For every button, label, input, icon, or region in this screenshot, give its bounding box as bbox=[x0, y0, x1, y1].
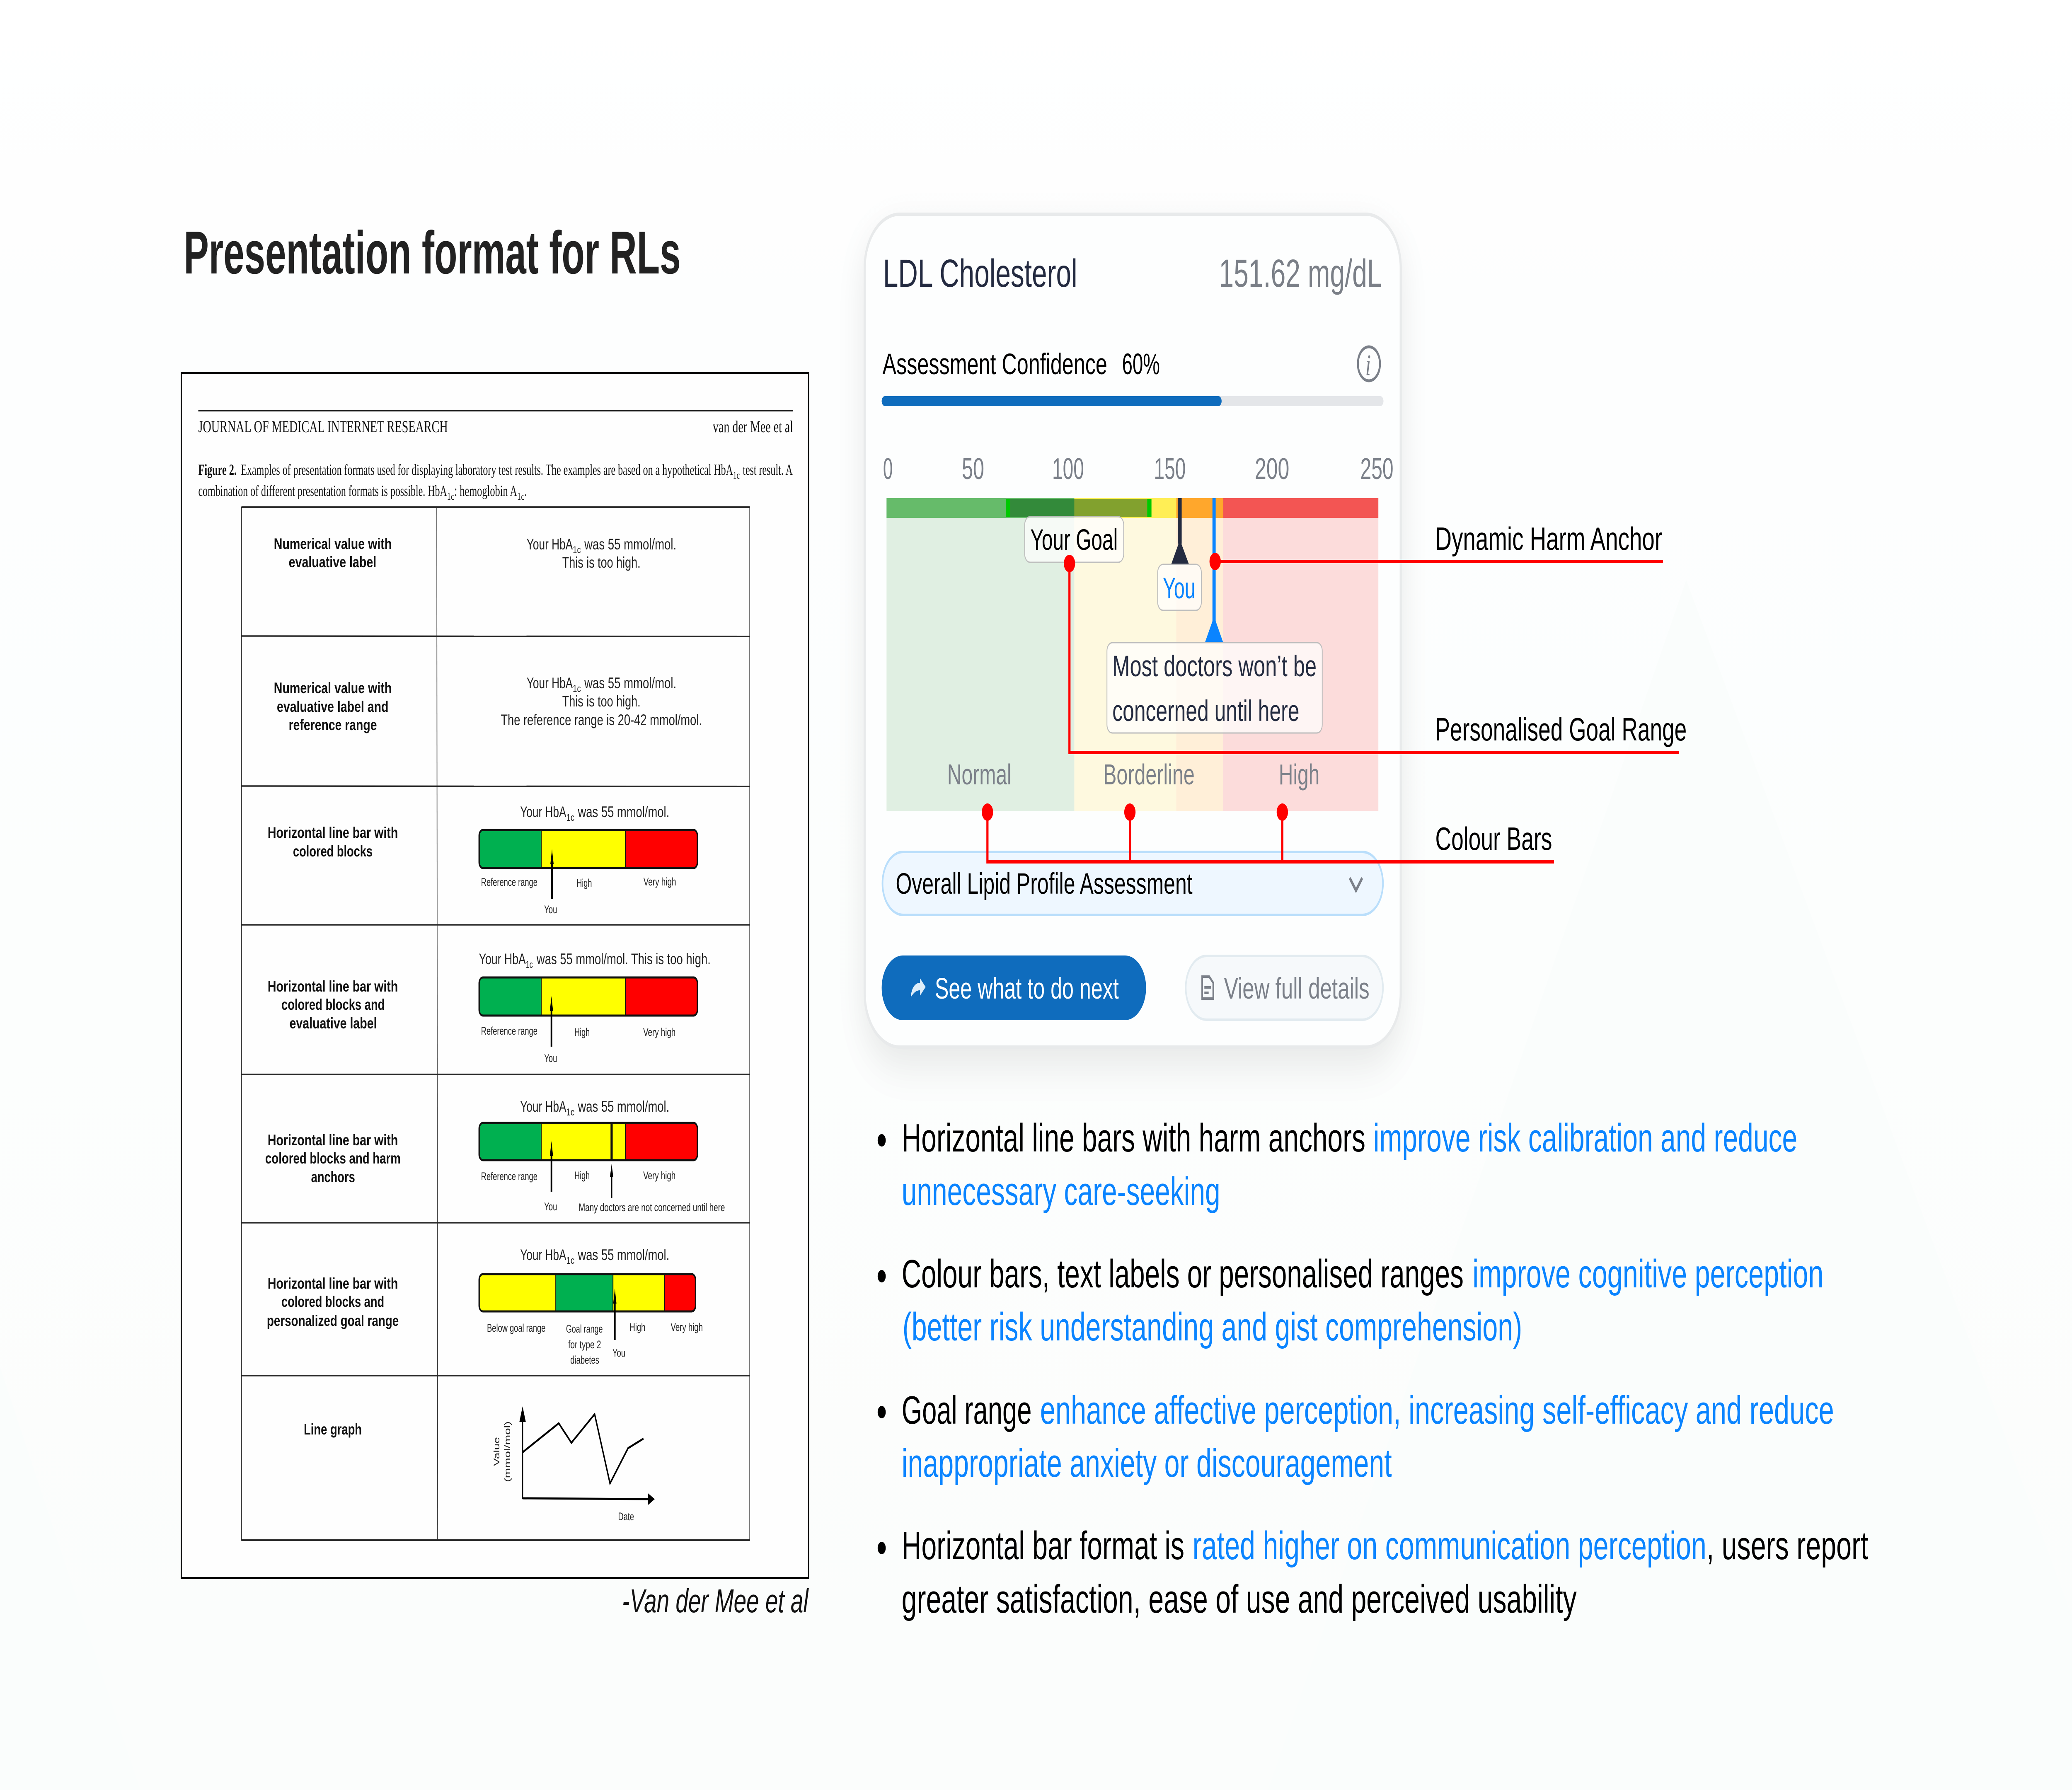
row 1: numerical value with evaluative label: 1c bbox=[573, 545, 581, 556]
bullet 1: improve risk calibration and reduce bbox=[1373, 1116, 1797, 1160]
citation: -Van der Mee et al bbox=[622, 1583, 809, 1620]
bullet 4: , users report bbox=[1706, 1524, 1868, 1568]
figure caption: . bbox=[525, 482, 527, 499]
row 5: horizontal line bar with colored blocks and harm anchors: You bbox=[544, 1200, 557, 1213]
icon: info bbox=[1358, 347, 1380, 382]
row 5: horizontal line bar with colored blocks and harm anchors: anchors bbox=[311, 1168, 355, 1185]
axis numbers: 150 bbox=[1154, 452, 1186, 485]
panel: research paper figure bbox=[181, 373, 809, 1579]
row 5: horizontal line bar with colored blocks and harm anchors: Many doctors are not concerned until here bbox=[579, 1201, 725, 1214]
row 4: horizontal line bar with colored blocks and evaluative label bbox=[268, 951, 711, 1064]
label: you: You bbox=[1163, 572, 1196, 605]
row 4: horizontal line bar with colored blocks and evaluative label: colored blocks and bbox=[281, 996, 385, 1013]
title: Presentation format for RLs bbox=[184, 219, 681, 287]
row 2: numerical value with evaluative label and reference range: was 55 mmol/mol. bbox=[584, 675, 676, 692]
row 5: horizontal line bar with colored blocks and harm anchors: Very high bbox=[643, 1169, 675, 1182]
row 3: horizontal line bar with colored blocks: Reference range bbox=[481, 876, 537, 888]
bullet 4 bbox=[878, 1524, 1868, 1621]
figure caption: 1c bbox=[447, 490, 454, 502]
row 6: horizontal line bar with colored blocks and personalized goal range: Below goal range bbox=[487, 1321, 545, 1334]
callout: personalised goal range: Personalised Goal Range bbox=[1435, 711, 1687, 747]
row 7: line graph: Line graph bbox=[304, 1421, 362, 1438]
row 1: numerical value with evaluative label: Numerical value with bbox=[274, 535, 392, 552]
bullet 2 bbox=[878, 1252, 1823, 1349]
dropdown: overall lipid profile assessment bbox=[883, 852, 1383, 915]
row 2: numerical value with evaluative label and reference range: Your HbA bbox=[527, 675, 573, 692]
row 6: horizontal line bar with colored blocks and personalized goal range: personalized goal range bbox=[267, 1312, 399, 1329]
label: most doctors: Most doctors won’t be bbox=[1112, 650, 1317, 682]
callout: dynamic harm anchor: Dynamic Harm Anchor bbox=[1435, 520, 1662, 557]
bullet 1 bbox=[878, 1116, 1797, 1214]
row 2: numerical value with evaluative label and reference range: 1c bbox=[573, 684, 581, 694]
row 6: horizontal line bar with colored blocks and personalized goal range: colored blocks and bbox=[281, 1293, 384, 1310]
row 4: horizontal line bar with colored blocks and evaluative label: Your HbA bbox=[479, 951, 526, 968]
row 6: horizontal line bar with colored blocks and personalized goal range bbox=[267, 1246, 703, 1366]
table grid bbox=[242, 507, 750, 1540]
row 3: horizontal line bar with colored blocks: Horizontal line bar with bbox=[268, 824, 398, 841]
row 4: horizontal line bar with colored blocks and evaluative label: was 55 mmol/mol. This is too high. bbox=[536, 951, 711, 968]
zone labels: Normal bbox=[947, 758, 1012, 791]
row 3: horizontal line bar with colored blocks: 1c bbox=[566, 813, 574, 823]
row 2: numerical value with evaluative label and reference range: evaluative label and bbox=[277, 698, 389, 715]
row 1: numerical value with evaluative label: evaluative label bbox=[289, 554, 376, 571]
bullet 4: rated higher on communication perception bbox=[1193, 1524, 1706, 1568]
row 3: horizontal line bar with colored blocks bbox=[268, 803, 697, 916]
callout: colour bars: Colour Bars bbox=[1435, 820, 1552, 857]
axis numbers: 200 bbox=[1255, 452, 1289, 485]
row 5: horizontal line bar with colored blocks and harm anchors: Reference range bbox=[481, 1170, 537, 1183]
icon: share arrow bbox=[911, 978, 926, 997]
bullet 3 bbox=[878, 1388, 1834, 1485]
axis numbers: 0 bbox=[883, 452, 893, 485]
row 6: horizontal line bar with colored blocks and personalized goal range: You bbox=[612, 1346, 625, 1359]
figure caption: Examples of presentation formats used for displaying laboratory test results. The examples are based on a hypothetical HbA bbox=[241, 461, 733, 478]
figure caption: combination of different presentation formats is possible. HbA bbox=[198, 482, 447, 499]
row 3: horizontal line bar with colored blocks: was 55 mmol/mol. bbox=[578, 803, 669, 820]
row 1: numerical value with evaluative label: This is too high. bbox=[562, 554, 641, 571]
row 7: line graph: (mmol/mol) bbox=[503, 1421, 512, 1482]
assessment confidence bbox=[882, 348, 1384, 406]
row 6: horizontal line bar with colored blocks and personalized goal range: Horizontal line bar with bbox=[268, 1275, 398, 1292]
bullet 4: Horizontal bar format is bbox=[902, 1524, 1184, 1568]
row 7: line graph: Date bbox=[618, 1510, 634, 1523]
row 7: line graph: Value bbox=[492, 1437, 501, 1466]
journal header: JOURNAL OF MEDICAL INTERNET RESEARCH bbox=[198, 418, 448, 436]
bullet 3: inappropriate anxiety or discouragement bbox=[902, 1442, 1392, 1485]
figure caption: : hemoglobin A bbox=[454, 482, 517, 499]
dropdown: overall lipid profile assessment: Overall Lipid Profile Assessment bbox=[896, 867, 1193, 900]
icon: info: i bbox=[1365, 349, 1371, 382]
row 1: numerical value with evaluative label: was 55 mmol/mol. bbox=[584, 536, 676, 553]
row 4: horizontal line bar with colored blocks and evaluative label: Reference range bbox=[481, 1024, 537, 1037]
panel: LDL cholesterol card bbox=[865, 214, 1401, 1064]
row 6: horizontal line bar with colored blocks and personalized goal range: for type 2 bbox=[568, 1338, 601, 1351]
row 1: numerical value with evaluative label bbox=[274, 535, 676, 571]
your value marker bbox=[1171, 498, 1189, 564]
row 2: numerical value with evaluative label and reference range: Numerical value with bbox=[274, 680, 392, 697]
label: most doctors: concerned until here bbox=[1112, 694, 1299, 727]
row 2: numerical value with evaluative label and reference range: The reference range is 20-42 mmol/mol. bbox=[501, 711, 702, 728]
row 2: numerical value with evaluative label and reference range: reference range bbox=[289, 716, 377, 733]
journal header: van der Mee et al bbox=[713, 418, 793, 436]
row 5: horizontal line bar with colored blocks and harm anchors: 1c bbox=[566, 1107, 574, 1118]
figure caption: 1c bbox=[733, 469, 740, 481]
figure caption bbox=[198, 461, 793, 502]
assessment confidence: Assessment Confidence bbox=[883, 348, 1107, 380]
row 5: horizontal line bar with colored blocks and harm anchors bbox=[265, 1098, 725, 1214]
row 5: horizontal line bar with colored blocks and harm anchors: colored blocks and harm bbox=[265, 1150, 401, 1167]
bullet 3: enhance affective perception, increasing self-efficacy and reduce bbox=[1040, 1388, 1834, 1432]
figure caption: test result. A bbox=[743, 461, 793, 478]
card value: 151.62 mg/dL bbox=[1219, 251, 1382, 295]
figure caption: Figure 2. bbox=[198, 461, 237, 478]
bullet 1: unnecessary care-seeking bbox=[902, 1170, 1220, 1214]
row 3: horizontal line bar with colored blocks: High bbox=[576, 876, 592, 889]
icon: document bbox=[1202, 977, 1213, 999]
card heading: LDL Cholesterol bbox=[883, 251, 1077, 295]
button: view full details bbox=[1186, 956, 1383, 1020]
axis numbers: 50 bbox=[962, 452, 984, 485]
axis numbers: 250 bbox=[1360, 452, 1394, 485]
label: you bbox=[1158, 564, 1201, 610]
axis numbers bbox=[883, 452, 1394, 485]
row 3: horizontal line bar with colored blocks: You bbox=[544, 903, 557, 916]
zone labels: High bbox=[1279, 758, 1319, 791]
axis numbers: 100 bbox=[1052, 452, 1084, 485]
row 1: numerical value with evaluative label: Your HbA bbox=[527, 536, 573, 553]
button: see what to do next: See what to do next bbox=[935, 972, 1119, 1005]
row 5: horizontal line bar with colored blocks and harm anchors: was 55 mmol/mol. bbox=[578, 1098, 669, 1115]
bullet 1: Horizontal line bars with harm anchors bbox=[902, 1116, 1365, 1160]
bullet 2: improve cognitive perception bbox=[1472, 1252, 1823, 1296]
journal header bbox=[198, 410, 793, 436]
row 5: horizontal line bar with colored blocks and harm anchors: High bbox=[574, 1169, 590, 1182]
row 6: horizontal line bar with colored blocks and personalized goal range: 1c bbox=[566, 1255, 574, 1266]
row 6: horizontal line bar with colored blocks and personalized goal range: Goal range bbox=[566, 1322, 603, 1335]
label: most doctors bbox=[1107, 643, 1322, 733]
label: your goal: Your Goal bbox=[1030, 523, 1118, 556]
label: your goal bbox=[1025, 517, 1124, 562]
assessment confidence: 60% bbox=[1122, 348, 1160, 380]
callout: colour bars bbox=[982, 803, 1554, 862]
row 4: horizontal line bar with colored blocks and evaluative label: Horizontal line bar with bbox=[268, 978, 398, 995]
row 6: horizontal line bar with colored blocks and personalized goal range: Very high bbox=[670, 1321, 703, 1333]
callout: dynamic harm anchor bbox=[1210, 520, 1663, 570]
row 6: horizontal line bar with colored blocks and personalized goal range: diabetes bbox=[570, 1353, 599, 1366]
bullet 4: greater satisfaction, ease of use and perceived usability bbox=[902, 1577, 1577, 1621]
row 7: line graph bbox=[304, 1406, 655, 1523]
row 5: horizontal line bar with colored blocks and harm anchors: Horizontal line bar with bbox=[268, 1132, 398, 1149]
zone backgrounds bbox=[886, 518, 1378, 811]
figure caption: 1c bbox=[517, 490, 525, 502]
row 4: horizontal line bar with colored blocks and evaluative label: You bbox=[544, 1052, 557, 1064]
row 6: horizontal line bar with colored blocks and personalized goal range: Your HbA bbox=[520, 1246, 566, 1263]
row 6: horizontal line bar with colored blocks and personalized goal range: was 55 mmol/mol. bbox=[578, 1246, 669, 1263]
colour bar bbox=[886, 498, 1378, 518]
row 3: horizontal line bar with colored blocks: colored blocks bbox=[293, 843, 373, 860]
row 5: horizontal line bar with colored blocks and harm anchors: Your HbA bbox=[520, 1098, 566, 1115]
row 4: horizontal line bar with colored blocks and evaluative label: Very high bbox=[643, 1026, 675, 1038]
button: view full details: View full details bbox=[1224, 972, 1370, 1005]
bullet 2: Colour bars, text labels or personalised ranges bbox=[902, 1252, 1464, 1296]
row 2: numerical value with evaluative label and reference range: This is too high. bbox=[562, 693, 641, 710]
row 3: horizontal line bar with colored blocks: Very high bbox=[644, 875, 676, 888]
row 6: horizontal line bar with colored blocks and personalized goal range: High bbox=[630, 1321, 645, 1333]
button: see what to do next bbox=[882, 955, 1146, 1020]
harm anchor marker bbox=[1205, 498, 1223, 643]
row 4: horizontal line bar with colored blocks and evaluative label: evaluative label bbox=[290, 1015, 377, 1032]
callout: personalised goal range bbox=[1064, 555, 1687, 752]
row 3: horizontal line bar with colored blocks: Your HbA bbox=[520, 803, 566, 820]
row 4: horizontal line bar with colored blocks and evaluative label: 1c bbox=[526, 960, 533, 970]
bullet 3: Goal range bbox=[902, 1388, 1032, 1432]
zone labels: Borderline bbox=[1103, 758, 1195, 791]
row 2: numerical value with evaluative label and reference range bbox=[274, 675, 702, 733]
zone labels bbox=[947, 758, 1319, 791]
bullet 2: (better risk understanding and gist comprehension) bbox=[903, 1305, 1522, 1349]
row 4: horizontal line bar with colored blocks and evaluative label: High bbox=[574, 1026, 590, 1038]
